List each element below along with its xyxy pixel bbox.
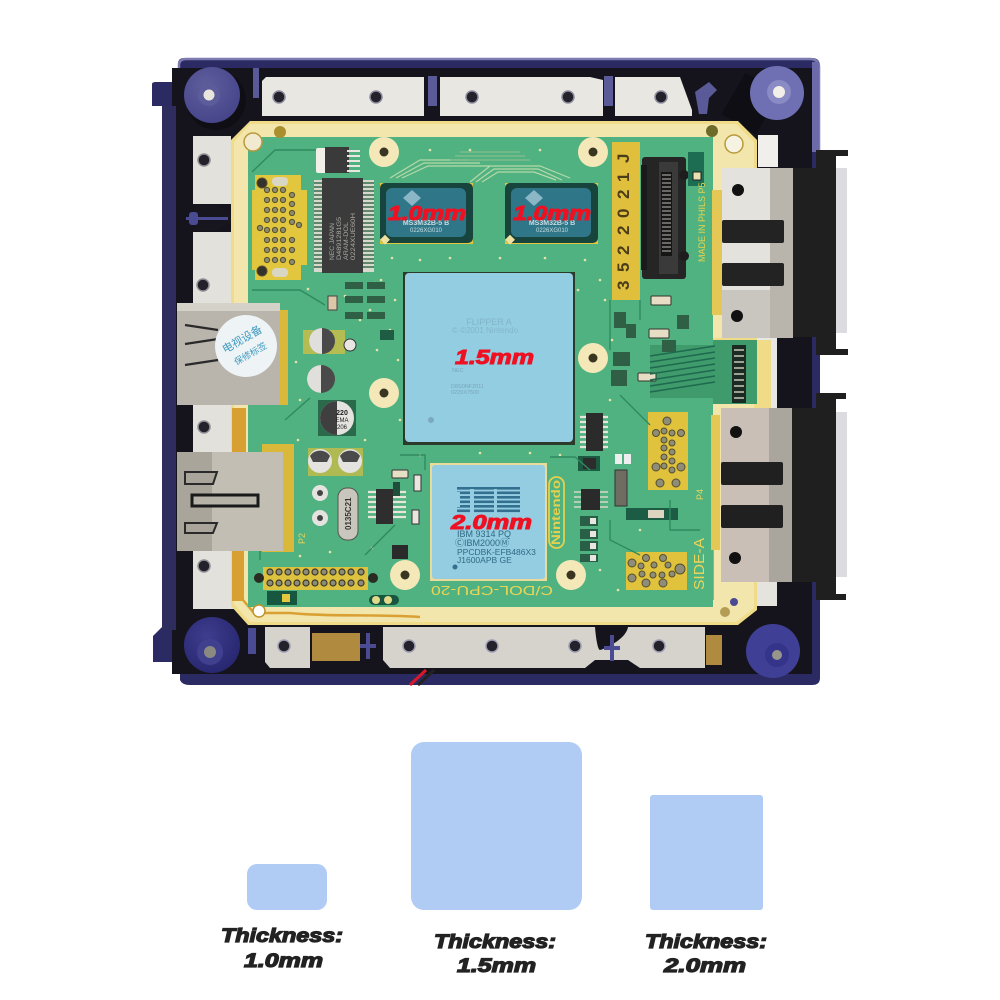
board silkscreen P2: P2 xyxy=(297,533,307,544)
gold number strip: 0 xyxy=(614,209,633,218)
left USB-like connector with sticker: 保修标签 xyxy=(232,340,269,367)
caption 1.5mm: Thickness: xyxy=(434,932,556,953)
metal strip right xyxy=(758,135,778,167)
thermal pad 2.0mm on IBM chip xyxy=(430,463,547,581)
grey latch strip xyxy=(836,412,847,577)
bottom plate holes xyxy=(278,640,665,652)
bottom shield plates xyxy=(265,627,705,668)
board silkscreen P4: P4 xyxy=(695,489,705,500)
yellow solder pad right lower xyxy=(626,552,687,590)
thermal pad 1.5mm on main chip: 0229X7500 xyxy=(451,390,479,396)
gold number strip: J xyxy=(614,154,633,163)
green test pad xyxy=(688,152,704,186)
thermal pad 2.0mm on IBM chip: PPCDBK-EFB486X3 xyxy=(457,547,536,557)
sample pad 1.5mm xyxy=(411,742,582,910)
memory chip right: MS3M32B-5 B xyxy=(529,220,575,227)
thermal pad 1.5mm on main chip: NEC xyxy=(452,368,464,374)
gold number strip: 2 xyxy=(614,190,633,199)
round paper sticker xyxy=(215,315,277,377)
metal strip right mid xyxy=(757,335,777,409)
connector window top xyxy=(721,462,783,485)
gold edge inner band xyxy=(234,124,754,622)
thermal pad 2.0mm on IBM chip: IBM 9314 PQ xyxy=(457,529,511,539)
screw post bottom left xyxy=(184,610,250,673)
NEC memory chip: D4891281G5 xyxy=(336,217,343,260)
solder mask traces left xyxy=(252,150,700,560)
solder vias xyxy=(295,149,641,591)
gold number strip: 5 xyxy=(614,263,633,272)
sample pad 2.0mm xyxy=(650,795,763,910)
worn metal band xyxy=(769,408,792,582)
thickness label on main chip: 1.5mm xyxy=(455,347,534,369)
memory chip right: 0226XG010 xyxy=(536,228,569,234)
capacitors: 220 xyxy=(336,410,348,417)
connector window top xyxy=(722,220,784,243)
NEC memory chip xyxy=(314,178,374,273)
metal shield plates top xyxy=(262,77,692,116)
thermal pad 1.5mm on main chip: © ©2001 Nintendo xyxy=(452,326,519,335)
NEC memory chip: NEC JAPAN xyxy=(329,223,336,260)
shell hole bottom xyxy=(731,310,743,322)
grey latch strip xyxy=(836,168,847,333)
upper right connector xyxy=(722,150,848,355)
left wall of case xyxy=(162,106,176,630)
console case with circuit board xyxy=(152,58,848,685)
black ribbon connector xyxy=(641,157,689,279)
purple clips bottom xyxy=(248,628,620,661)
shield plate holes left xyxy=(197,154,210,572)
shell hole top xyxy=(732,184,744,196)
board silkscreen P5: MADE IN PHILS P5 xyxy=(697,182,707,262)
metal shell xyxy=(722,168,793,338)
black housing xyxy=(792,393,846,600)
metal shell lower wear xyxy=(722,290,770,338)
passive row near C15 xyxy=(626,508,678,520)
logic chip center right xyxy=(580,413,608,451)
caption 2.0mm: Thickness: xyxy=(645,932,767,953)
thermal pad 1.5mm on main chip xyxy=(403,272,575,445)
green solder mask xyxy=(248,137,757,607)
purple outer case xyxy=(152,58,820,685)
NEC memory chip: 0224XUE60H xyxy=(350,213,357,260)
board silkscreen C/DOL-CPU-20: C/DOL-CPU-20 xyxy=(431,583,553,598)
sample pad 1.0mm xyxy=(247,864,327,910)
small components near capacitors xyxy=(328,282,394,340)
capacitors xyxy=(303,328,363,526)
cream screw rings xyxy=(369,137,608,590)
corner mounting holes xyxy=(244,125,743,617)
screw post bottom right xyxy=(734,612,800,678)
connector window bottom xyxy=(722,263,784,286)
thermal pad 2.0mm on IBM chip: J1600APB GE xyxy=(457,555,512,565)
worn metal band xyxy=(770,168,793,338)
screw post top left xyxy=(184,67,246,130)
caption 1.5mm xyxy=(434,932,556,977)
caption 2.0mm xyxy=(645,932,767,977)
connector window bottom xyxy=(721,505,783,528)
left USB-like connector with sticker xyxy=(177,303,288,405)
gold number strip: 3 xyxy=(614,281,633,290)
memory chip right xyxy=(505,183,598,245)
gold number strip: 1 xyxy=(614,173,633,182)
caption 1.0mm: 1.0mm xyxy=(244,951,323,972)
gold number strip: 2 xyxy=(614,246,633,255)
left ethernet-style connector xyxy=(177,444,294,552)
black housing xyxy=(792,150,848,355)
thermal pad 2.0mm on IBM chip: ⒸIBM2000Ⓜ xyxy=(455,538,509,548)
thickness label on IBM chip: 2.0mm xyxy=(450,512,532,534)
resistor arrays xyxy=(580,516,598,562)
thickness label on memory right: 1.0mm xyxy=(513,203,591,225)
dark case interior xyxy=(172,68,812,674)
board silkscreen SIDE-A: SIDE-A xyxy=(691,538,708,590)
bus traces between memory chips xyxy=(390,152,570,182)
square chip U14 xyxy=(574,489,608,510)
caption 2.0mm: 2.0mm xyxy=(663,956,746,977)
passive components cluster right xyxy=(611,296,689,386)
logic chip center left xyxy=(368,470,421,559)
Nintendo logo on board xyxy=(549,477,564,548)
gold strips beside connectors xyxy=(711,190,722,550)
metal shell xyxy=(721,408,792,582)
thickness label on memory left: 1.0mm xyxy=(388,203,466,225)
NEC memory chip: ARAM-DOL xyxy=(343,222,350,260)
purple clips top xyxy=(253,68,717,114)
purple clip left xyxy=(186,205,231,231)
bottom brown blocks xyxy=(312,633,722,665)
screw post top right xyxy=(721,66,804,134)
crystal X2 xyxy=(615,454,631,506)
capacitors: 206 xyxy=(337,425,348,431)
top purple rim highlight xyxy=(179,59,819,150)
circuit board gold edge xyxy=(231,121,771,625)
yellow solder pad right upper xyxy=(648,412,688,490)
thermal pad 1.5mm on main chip: FLIPPER A xyxy=(466,317,512,327)
metal shield plates left xyxy=(193,136,235,609)
thermal pad 1.5mm on main chip: D8S0NF2011 xyxy=(451,384,484,390)
right purple rim upper xyxy=(812,62,819,152)
memory chip left: MS3M32B-5 B xyxy=(403,220,449,227)
gold number strip xyxy=(612,142,640,300)
caption 1.0mm xyxy=(221,926,343,972)
shield plate holes top xyxy=(273,91,667,103)
Nintendo logo on board: Nintendo xyxy=(551,480,563,545)
shell hole top xyxy=(730,426,742,438)
small test pads lower left xyxy=(267,591,399,605)
memory chip left: 0226XG010 xyxy=(410,228,443,234)
lower right connector xyxy=(721,393,847,600)
red and black wire xyxy=(410,670,434,685)
capacitors: EMA xyxy=(335,418,349,424)
metal strip right lower xyxy=(757,580,777,606)
bottom connector header xyxy=(254,567,378,590)
left USB-like connector with sticker: 电视设备 xyxy=(219,322,265,356)
yellow solder pad top left xyxy=(252,175,307,280)
small chip U8 xyxy=(578,456,600,471)
caption 1.5mm: 1.5mm xyxy=(457,956,536,977)
gold left rust xyxy=(232,408,714,601)
crystal oscillator xyxy=(338,488,358,540)
caption 1.0mm: Thickness: xyxy=(221,926,343,947)
memory chip left xyxy=(380,183,473,245)
darker green circuit area xyxy=(650,340,757,404)
gold number strip: 2 xyxy=(614,226,633,235)
fine trace fan-out to connector xyxy=(650,345,746,403)
crystal oscillator: 0135C21 xyxy=(344,497,353,530)
gold bottom rust xyxy=(243,600,420,617)
small regulator chip xyxy=(316,147,360,173)
shell hole bottom xyxy=(729,552,741,564)
